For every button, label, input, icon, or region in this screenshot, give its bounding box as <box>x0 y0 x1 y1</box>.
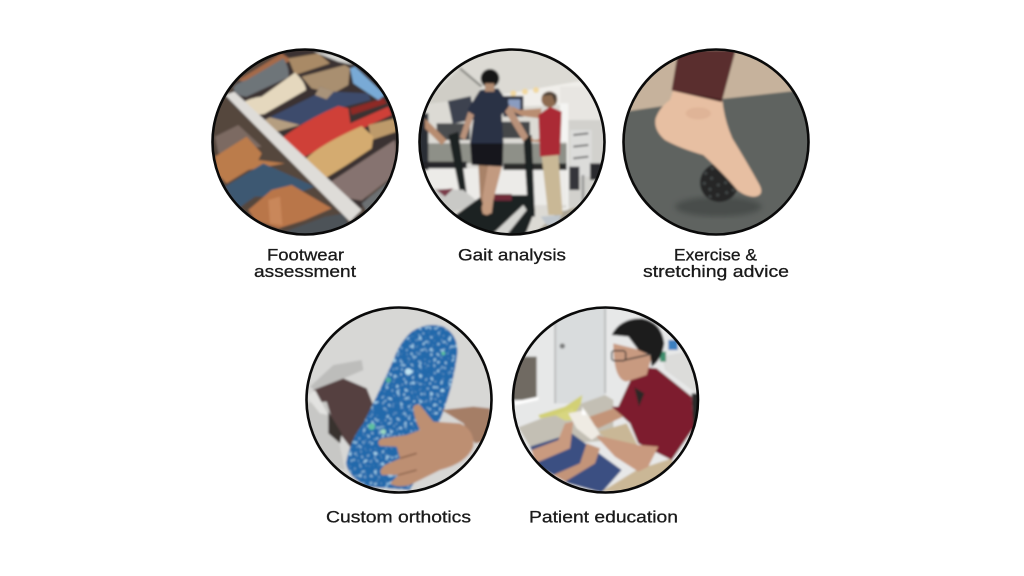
circle outline <box>306 308 492 492</box>
photo: shoes on shelf <box>214 50 396 234</box>
label: Exercise & stretching advice: Exercise & <box>674 246 758 264</box>
label: Footwear assessment <box>254 246 356 281</box>
panel: exercise and stretching advice <box>622 48 810 281</box>
label: Gait analysis: Gait analysis <box>458 246 566 264</box>
label: Patient education: Patient education <box>529 508 678 526</box>
circle outline <box>212 50 398 234</box>
label: Exercise & stretching advice: stretching advice <box>643 262 789 281</box>
photo: grinding a blue orthotic <box>308 308 490 492</box>
circle outline <box>513 308 698 492</box>
photo: clinician with foot model <box>514 308 697 492</box>
circle outline <box>420 50 604 234</box>
label: Exercise & stretching advice <box>643 246 789 281</box>
panel: custom orthotics <box>305 306 493 523</box>
label: Footwear assessment: assessment <box>254 262 356 281</box>
panel: gait analysis <box>418 48 606 264</box>
photo: patient on treadmill <box>420 50 604 234</box>
panel: patient education <box>512 306 700 523</box>
label: Footwear assessment: Footwear <box>267 246 344 264</box>
photo: foot rolling on massage ball <box>624 50 808 234</box>
panel: footwear assessment <box>211 48 399 278</box>
circle outline <box>624 50 808 234</box>
label: Custom orthotics: Custom orthotics <box>326 508 471 526</box>
